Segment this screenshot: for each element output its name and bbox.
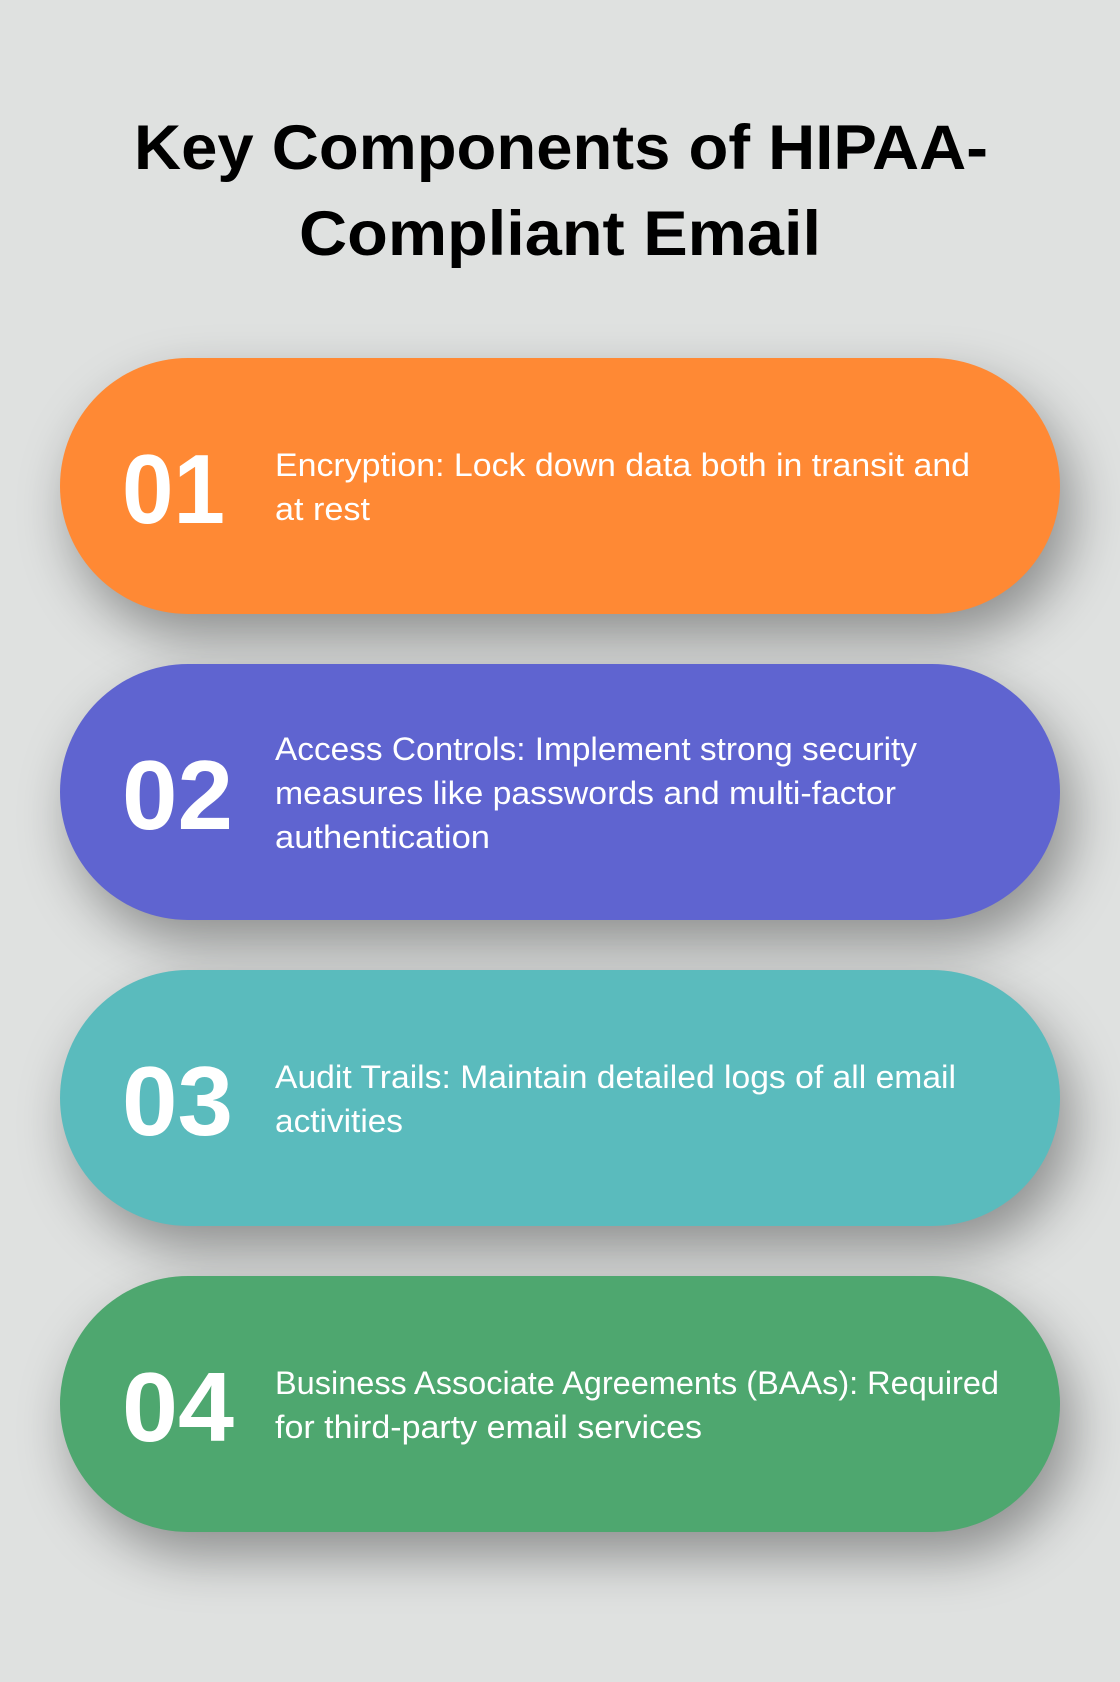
text: business associate agreements [275, 1365, 999, 1445]
text: business associate agreements: Business Associate Agreements (BAAs): Required [275, 1365, 999, 1401]
number 02: 02 [122, 740, 233, 850]
panel: 03 audit trails [60, 970, 1060, 1226]
number 01: 01 [122, 434, 225, 544]
text: encryption: at rest [275, 491, 370, 527]
title: Key Components of HIPAA- [134, 113, 988, 183]
text: access controls: Access Controls: Implement strong security [275, 731, 917, 767]
panel: 04 business associate agreements [60, 1276, 1060, 1532]
text: audit trails: Audit Trails: Maintain detailed logs of all email [275, 1059, 956, 1095]
title: Compliant Email [299, 199, 821, 269]
number 04: 04 [122, 1352, 234, 1462]
text: access controls: measures like passwords and multi-factor [275, 775, 896, 811]
text: audit trails [275, 1059, 956, 1139]
text: audit trails: activities [275, 1103, 403, 1139]
text: business associate agreements: for third-party email services [275, 1409, 702, 1445]
text: access controls: authentication [275, 819, 490, 855]
text: encryption [275, 447, 970, 527]
title [134, 113, 988, 269]
text: access controls [275, 731, 917, 855]
panel: 02 access controls [60, 664, 1060, 920]
panel: 01 encryption [60, 358, 1060, 614]
text: encryption: Encryption: Lock down data both in transit and [275, 447, 970, 483]
number 03: 03 [122, 1046, 233, 1156]
